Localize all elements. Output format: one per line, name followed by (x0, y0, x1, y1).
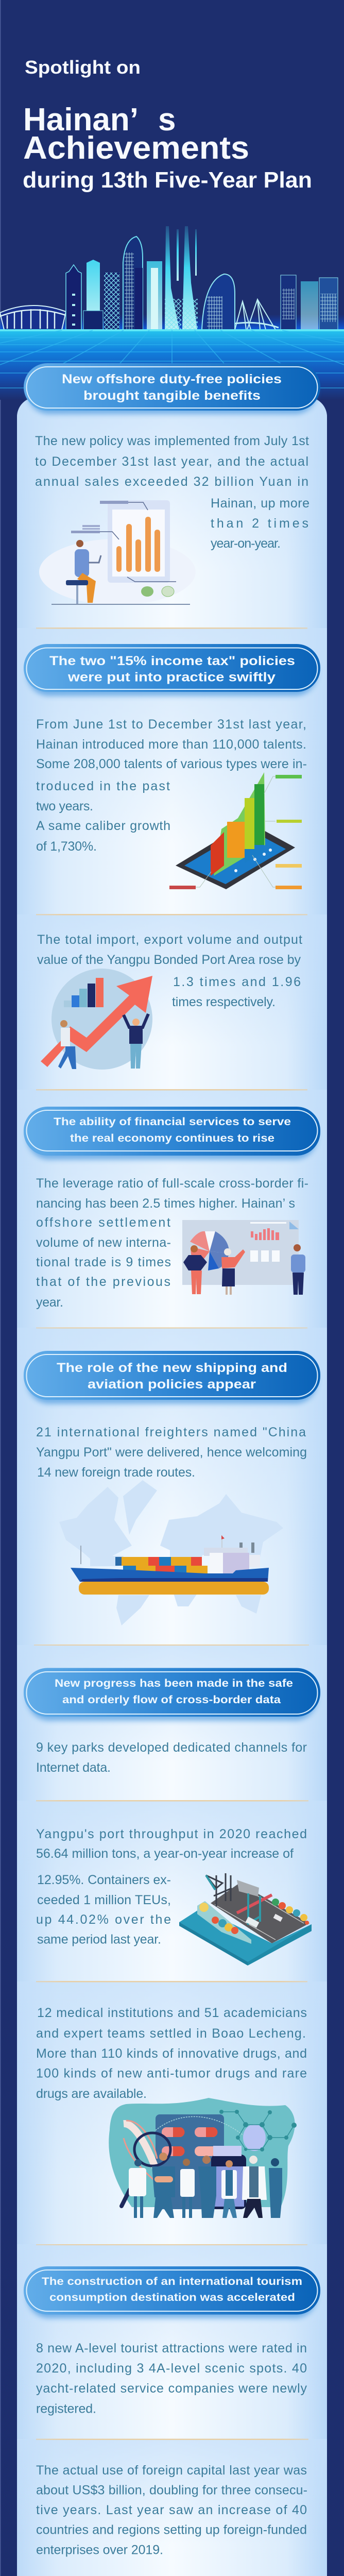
hero illustration: neon city skyline (0, 226, 344, 330)
text: cross-border financing: The leverage ratio of full-scale cross-border fi- (36, 1176, 308, 1191)
cable-stayed bridge (235, 299, 279, 330)
text: cross-border financing: year. (36, 1295, 63, 1310)
title block (23, 57, 312, 193)
text: duty-free sales: Hainan, up more (211, 496, 309, 511)
molecule (219, 2110, 297, 2151)
divider (36, 2439, 308, 2440)
text: Yangpu port throughput: Yangpu's port throughput in 2020 reached (36, 1827, 307, 1841)
heading: 15% income tax (24, 644, 320, 696)
divider (36, 1327, 307, 1328)
text: Yangpu port throughput (36, 1827, 307, 1946)
text: talents introduced: From June 1st to December 31st last year, (36, 717, 306, 732)
heading: shipping and aviation (24, 1351, 320, 1404)
heading: tourism consumption (24, 2266, 320, 2318)
divider (36, 1800, 308, 1801)
round building (202, 274, 235, 330)
text: duty-free sales: The new policy was implemented from July 1st (35, 434, 309, 448)
text: duty-free sales: annual sales exceeded 32 billion Yuan in (35, 474, 308, 489)
text: duty-free sales: than 2 times (211, 516, 308, 531)
text: Yangpu port throughput: 56.64 million tons, a year-on-year increase of (36, 1846, 294, 1861)
text: Boao Lecheng medical: and expert teams settled in Boao Lecheng. (36, 2026, 306, 2041)
heading: 15% income tax: The two "15% income tax" policies (49, 654, 295, 668)
panel: main light card (17, 363, 327, 2576)
text: duty-free sales: year-on-year. (211, 536, 281, 551)
text: cross-border financing: volume of new interna- (36, 1235, 171, 1250)
text: Boao Lecheng medical: More than 110 kinds of innovative drugs, and (36, 2046, 307, 2061)
heading: offshore duty-free policies: brought tangible benefits (83, 388, 261, 403)
text: Boao Lecheng medical: 12 medical institutions and 51 academicians (37, 2006, 307, 2020)
text: talents introduced: of 1,730%. (36, 839, 97, 854)
heading: tourism consumption: The construction of an international tourism (42, 2276, 302, 2287)
text: Internet data: Internet data. (36, 1760, 111, 1775)
icon: person working beside orange bar chart (39, 500, 196, 605)
text: talents introduced: Some 208,000 talents of various types were in- (36, 757, 307, 771)
capsules (162, 2127, 218, 2156)
text: Yangpu port throughput: same period last year. (37, 1932, 161, 1946)
text: Boao Lecheng medical (36, 2006, 307, 2101)
heading: cross-border data: New progress has been made in the safe (55, 1677, 293, 1689)
cyan blocks (83, 260, 119, 330)
text: Yangpu bonded port: times respectively. (172, 995, 276, 1009)
title: Hainan's: Hainan’ (23, 102, 137, 138)
text: tourist attractions: yacht-related service companies were newly (36, 2381, 307, 2396)
text: Yangpu bonded port (37, 933, 302, 1009)
text: tourist attractions: 2020, including 3 4A-level scenic spots. 40 (36, 2361, 307, 2376)
text: freighters (36, 1425, 307, 1480)
text: tourist attractions: 8 new A-level tourist attractions were rated in (36, 2341, 307, 2355)
text: foreign capital (36, 2463, 307, 2557)
title: spotlight on: Spotlight on (25, 57, 141, 78)
text: tourist attractions (36, 2341, 307, 2416)
text: Yangpu port throughput: 12.95%. Containers ex- (37, 1873, 171, 1887)
divider (36, 914, 307, 915)
text: cross-border financing: that of the previous (36, 1275, 170, 1289)
text: talents introduced: troduced in the past (36, 779, 170, 793)
heading: cross-border data: and orderly flow of cross-border data (62, 1694, 281, 1706)
text: cross-border financing: nancing has been 2.5 times higher. Hainan’ s (36, 1196, 295, 1211)
text: Internet data: 9 key parks developed dedicated channels for (36, 1740, 307, 1755)
heading: 15% income tax: were put into practice swiftly (67, 670, 276, 684)
text: talents introduced (36, 717, 307, 854)
text: Yangpu bonded port: 1.3 times and 1.96 (173, 975, 301, 989)
text: Boao Lecheng medical: 100 kinds of new anti-tumor drugs and rare (36, 2066, 307, 2080)
text: foreign capital: about US$3 billion, doubling for three consecu- (36, 2483, 307, 2498)
text: foreign capital: tive years. Last year saw an increase of 40 (36, 2503, 307, 2517)
icon: tablet with rising 3D bars (169, 772, 302, 889)
text: duty-free sales: to December 31st last year, and the actual (35, 454, 308, 469)
DNA and magnifier (122, 2121, 170, 2206)
text: Yangpu port throughput: up 44.02% over the (36, 1912, 171, 1927)
heading: financial services: The ability of financial services to serve (54, 1116, 291, 1128)
heading: shipping and aviation: aviation policies appear (88, 1377, 256, 1392)
hero illustration: glowing perspective grid (0, 329, 344, 400)
text: freighters: Yangpu Port" were delivered, hence welcoming (36, 1445, 307, 1460)
text: foreign capital: countries and regions setting up foreign-funded (36, 2522, 307, 2537)
text: Yangpu port throughput: ceeded 1 million TEUs, (37, 1893, 171, 1907)
text: Yangpu bonded port: The total import, export volume and output (37, 933, 302, 947)
heading: shipping and aviation: The role of the new shipping and (57, 1361, 287, 1375)
heading: tourism consumption: consumption destination was accelerated (49, 2292, 295, 2303)
text: cross-border financing: offshore settlement (36, 1215, 170, 1230)
text: foreign capital: The actual use of foreign capital last year was (36, 2463, 307, 2478)
text: freighters: 14 new foreign trade routes. (37, 1465, 195, 1480)
world map (59, 1480, 283, 1625)
icon: medical team with pills and molecules (109, 2098, 297, 2218)
heading: financial services (24, 1107, 320, 1160)
text: talents introduced: Hainan introduced more than 110,000 talents. (36, 737, 306, 752)
text: Boao Lecheng medical: drugs are available. (36, 2087, 147, 2101)
dotted tower (66, 265, 81, 330)
text: foreign capital: enterprises over 2019. (36, 2543, 163, 2557)
curved tower (123, 236, 162, 330)
title: Achievements: Achievements (23, 130, 249, 166)
heading: cross-border data (24, 1668, 320, 1721)
text: freighters: 21 international freighters named "China (36, 1425, 306, 1439)
text: duty-free sales (35, 434, 309, 551)
heading: financial services: the real economy continues to rise (70, 1132, 274, 1144)
title: Hainan's: s (158, 102, 176, 138)
ship (71, 1535, 269, 1595)
text: Yangpu bonded port: value of the Yangpu Bonded Port Area rose by (37, 953, 301, 967)
doctors (129, 2153, 282, 2218)
stadium (0, 306, 66, 330)
heading: offshore duty-free policies: New offshore duty-free policies (62, 372, 282, 386)
icon: container ship on world map (59, 1480, 283, 1625)
right-hand towers (281, 275, 338, 330)
heading: offshore duty-free policies (24, 363, 320, 414)
icon: isometric container port (179, 1873, 312, 1965)
icon: three people presenting charts (182, 1220, 305, 1295)
divider (36, 1981, 307, 1982)
icon: two people lifting red growth arrow (41, 969, 152, 1070)
needle towers (165, 226, 198, 330)
subtitle: during 13th Five-Year Plan: during 13th Five-Year Plan (23, 167, 312, 193)
text: Internet data (36, 1740, 307, 1775)
divider (36, 1089, 307, 1090)
divider (36, 2244, 307, 2245)
divider (36, 628, 307, 629)
divider (34, 1645, 309, 1646)
text: talents introduced: A same caliber growth (36, 819, 170, 833)
text: talents introduced: two years. (36, 799, 93, 814)
text: tourist attractions: registered. (36, 2402, 96, 2416)
text: cross-border financing: tional trade is 9 times (36, 1255, 171, 1269)
text: cross-border financing (36, 1176, 308, 1310)
